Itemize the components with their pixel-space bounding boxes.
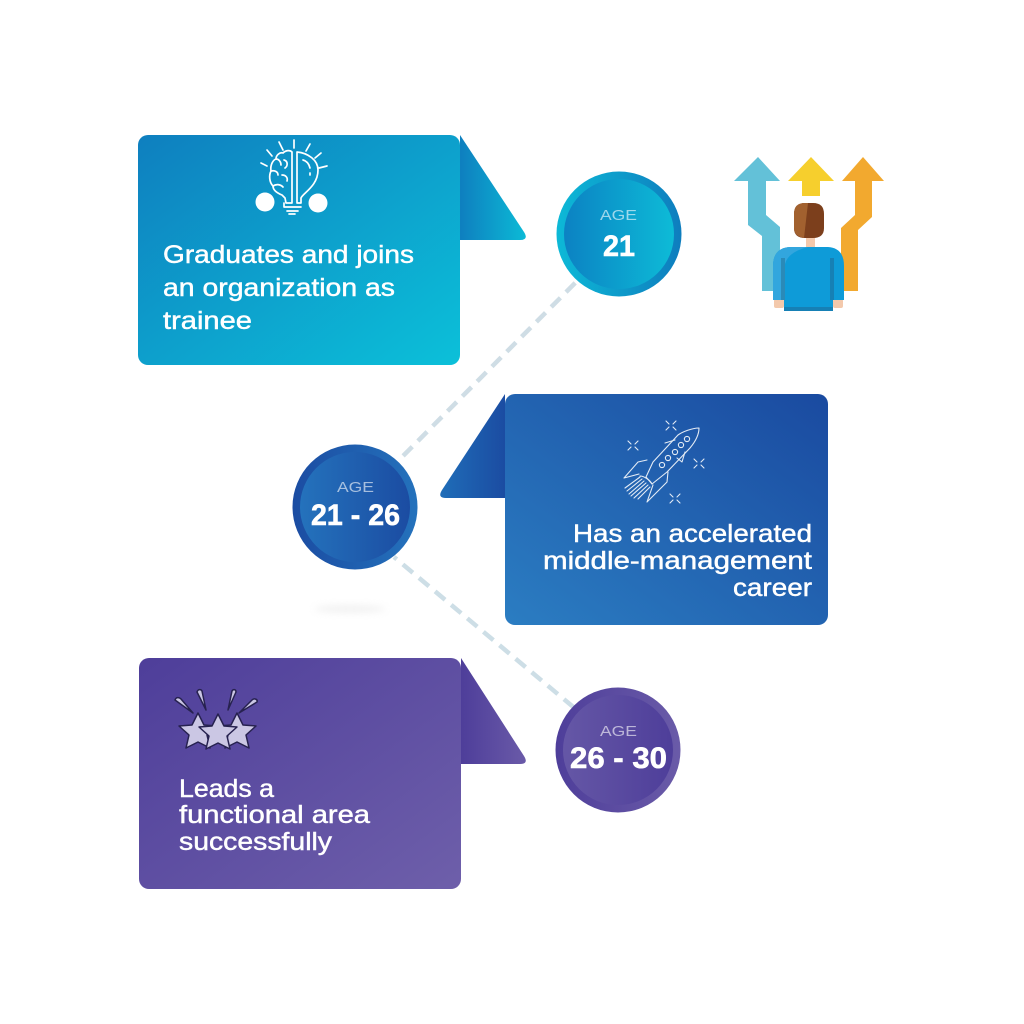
right arrow xyxy=(841,157,884,291)
panel background xyxy=(505,394,828,625)
badge: age 21-26: AGE xyxy=(337,479,374,496)
icon: rocket xyxy=(624,421,704,503)
panel text xyxy=(543,520,812,602)
badge: age 21-26 xyxy=(292,444,418,570)
badge: age 21: AGE xyxy=(600,207,637,224)
badge: age 21: 21 xyxy=(603,230,635,263)
panel background xyxy=(138,135,460,365)
panel text: middle-management xyxy=(543,547,812,575)
panel text: Leads a xyxy=(179,775,274,803)
connector: age 21 to age 21-26 xyxy=(400,268,590,459)
panel text: an organization as xyxy=(163,274,395,302)
person xyxy=(773,203,844,311)
panel text: trainee xyxy=(163,307,252,335)
badge: age 26-30: AGE xyxy=(600,723,637,740)
badge: age 26-30 xyxy=(556,688,680,812)
panel: leads functional area xyxy=(139,658,526,889)
panel text: successfully xyxy=(179,828,333,856)
connector: age 21-26 to age 26-30 xyxy=(394,557,590,721)
panel background xyxy=(139,658,461,889)
soft shadow beneath middle circle xyxy=(314,606,386,612)
badge: age 21-26: 21 - 26 xyxy=(311,499,400,532)
icon: person facing three arrows xyxy=(734,157,884,311)
left arrow xyxy=(734,157,780,291)
panel text: career xyxy=(733,574,812,602)
panel: graduate trainee xyxy=(138,135,526,365)
panel: accelerated middle management xyxy=(440,394,828,625)
panel tab xyxy=(440,394,505,498)
center arrow xyxy=(788,157,834,196)
badge: age 21 xyxy=(556,172,682,296)
badge: age 26-30: 26 - 30 xyxy=(570,742,667,775)
panel text: Graduates and joins xyxy=(163,241,414,269)
icon: three stars xyxy=(175,690,257,749)
panel text: Has an accelerated xyxy=(573,520,812,548)
panel text xyxy=(163,241,414,335)
panel tab xyxy=(461,658,526,764)
icon: brain and light bulb xyxy=(256,140,328,214)
panel text: functional area xyxy=(179,801,370,829)
panel text xyxy=(179,775,370,856)
panel tab xyxy=(460,135,526,240)
